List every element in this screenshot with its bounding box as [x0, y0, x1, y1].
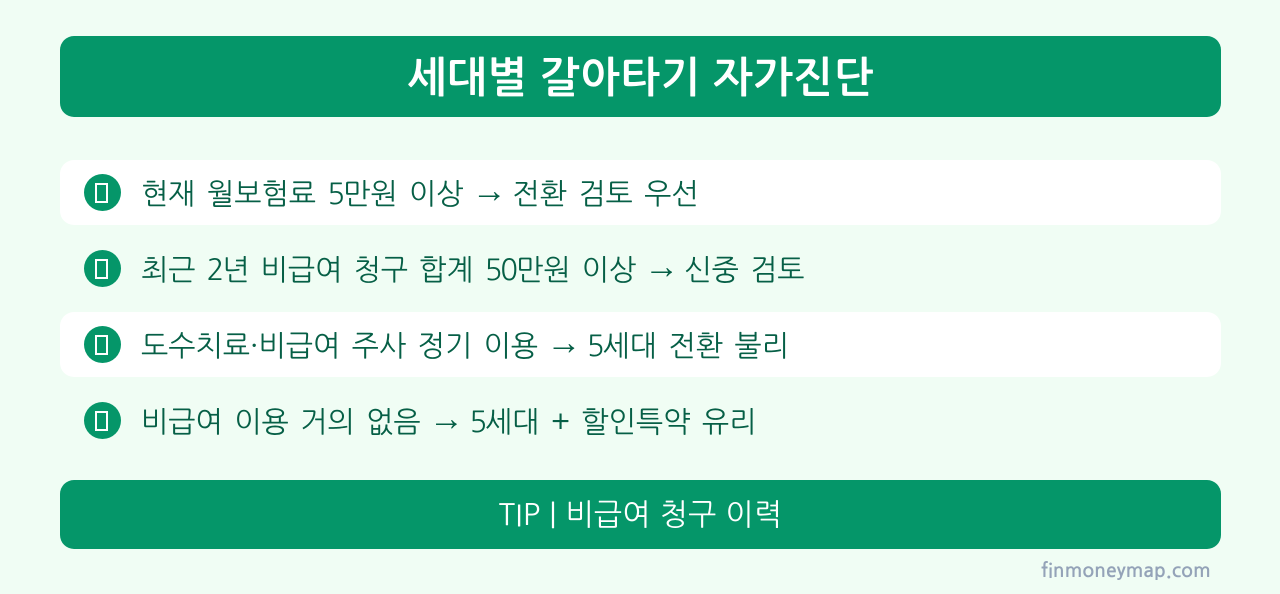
item 3 text: →	[546, 323, 581, 362]
item 3 text: 도수치료·비급여 주사 정기 이용 5세대 전환 불리	[141, 332, 789, 361]
item 2 text: 최근 2년 비급여 청구 합계 50만원 이상 신중 검토	[141, 256, 804, 285]
tip bar	[60, 480, 1221, 549]
watermark: finmoneymap.com	[1041, 561, 1211, 580]
item 2 text: →	[644, 247, 679, 286]
checklist item 2	[84, 247, 804, 287]
checklist item 3	[60, 312, 1221, 377]
tip bar: TIP | 비급여 청구 이력	[499, 500, 782, 530]
item 4 text: →	[429, 399, 464, 438]
icon: check 4	[84, 402, 121, 439]
checklist item 4	[84, 399, 756, 439]
title: 세대별 갈아타기 자가진단	[407, 58, 874, 99]
item 1 text: 현재 월보험료 5만원 이상 전환 검토 우선	[141, 180, 699, 209]
icon: check 1	[84, 174, 121, 211]
icon: check 2	[84, 250, 121, 287]
icon: check 3	[84, 326, 121, 363]
item 4 text: 비급여 이용 거의 없음 5세대 + 할인특약 유리	[141, 408, 756, 437]
checklist item 1	[60, 160, 1221, 225]
item 1 text: →	[472, 171, 507, 210]
title	[60, 36, 1221, 117]
